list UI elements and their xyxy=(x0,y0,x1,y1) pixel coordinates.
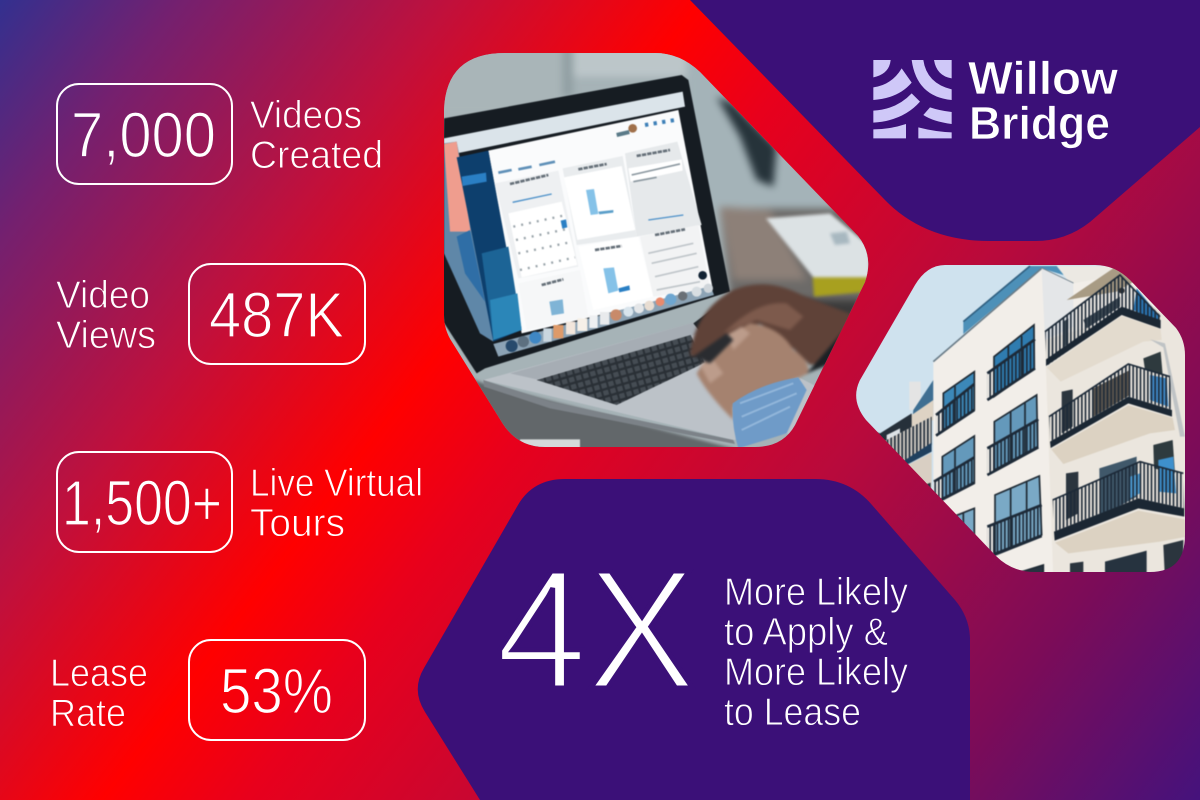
windows xyxy=(942,325,1043,580)
callout: 4X more likely: to Apply & xyxy=(724,611,888,654)
stat: 1,500+ Live Virtual Tours xyxy=(57,452,423,552)
photo: laptop xyxy=(440,40,880,460)
logo icon xyxy=(873,60,952,138)
stat: 487K Video Views: Video xyxy=(56,274,150,317)
dashboard cards xyxy=(495,120,710,330)
hands xyxy=(690,284,853,420)
stat: 7,000 Videos Created: Videos xyxy=(250,94,362,137)
panel: 4X shape xyxy=(418,479,970,800)
logo wordmark: Bridge xyxy=(969,97,1110,149)
logo wordmark xyxy=(968,52,1118,149)
stat: 1,500+ Live Virtual Tours: Live Virtual xyxy=(250,462,423,505)
stat: 53% Lease Rate xyxy=(50,640,365,740)
logo wordmark: Willow xyxy=(968,52,1118,104)
balconies xyxy=(1045,275,1187,580)
stat: 1,500+ Live Virtual Tours: 1,500+ xyxy=(62,467,222,539)
stat: 7,000 Videos Created: 7,000 xyxy=(71,99,216,171)
stat: 487K Video Views xyxy=(56,264,365,364)
stat: 7,000 Videos Created xyxy=(57,84,383,184)
logo: Willow Bridge xyxy=(873,52,1118,149)
stat: 53% Lease Rate: 53% xyxy=(220,655,333,727)
dock icons xyxy=(506,284,713,352)
callout: 4X more likely xyxy=(496,535,908,734)
stat: 7,000 Videos Created: Created xyxy=(250,134,383,177)
stat: 1,500+ Live Virtual Tours: Tours xyxy=(250,502,345,545)
stat: 53% Lease Rate: Lease xyxy=(50,652,148,695)
photo: apartment building xyxy=(850,260,1200,580)
window railings xyxy=(934,339,1042,558)
callout: 4X more likely: More Likely xyxy=(724,651,908,694)
neighbouring building xyxy=(877,380,934,489)
callout: 4X more likely: 4X xyxy=(496,535,696,725)
stat: 53% Lease Rate: Rate xyxy=(50,692,126,735)
callout: 4X more likely: to Lease xyxy=(724,691,861,734)
panel: logo shape xyxy=(690,0,1200,241)
callout: 4X more likely: More Likely xyxy=(724,571,908,614)
stat: 487K Video Views: Views xyxy=(56,314,156,357)
stat: 487K Video Views: 487K xyxy=(209,279,344,351)
